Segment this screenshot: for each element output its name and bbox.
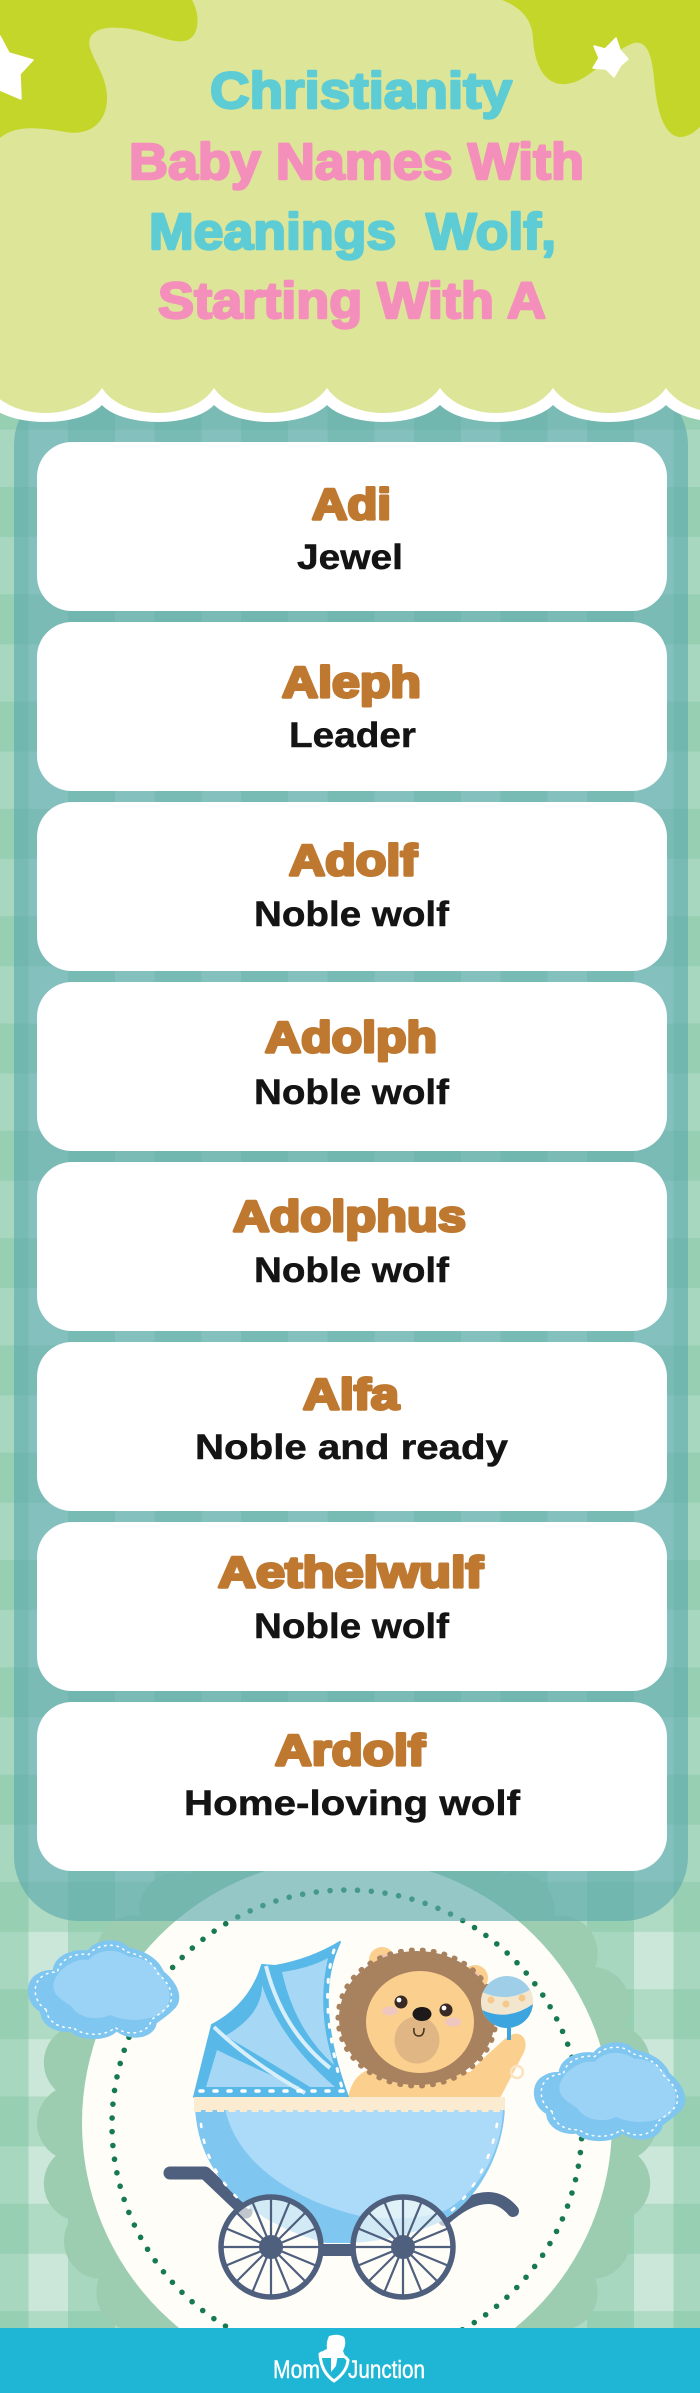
- panel: name cards: [37, 442, 667, 1871]
- card: Ardolf: [37, 1702, 667, 1871]
- card: Adolphus: Noble wolf: [254, 1251, 449, 1290]
- title: Baby Names With: [129, 133, 584, 190]
- header: green banner with scalloped edge: [0, 0, 700, 422]
- card: Aleph: Leader: [289, 716, 416, 755]
- card: Aethelwulf: Aethelwulf: [218, 1548, 483, 1597]
- card: Ardolf: Ardolf: [275, 1726, 425, 1775]
- card: Adi: Adi: [312, 480, 391, 529]
- title: [129, 62, 584, 329]
- card: Adolphus: [37, 1162, 667, 1331]
- card: Adolph: Adolph: [265, 1013, 437, 1062]
- icon: rattle: [481, 1976, 533, 2040]
- card: Alfa: Noble and ready: [195, 1428, 509, 1467]
- card: Ardolf: Home-loving wolf: [184, 1784, 520, 1823]
- card: Alfa: [37, 1342, 667, 1511]
- card: Adolf: Adolf: [289, 836, 417, 885]
- icon: mother and child: [320, 2335, 348, 2381]
- icon: left star: [0, 36, 33, 99]
- logo: MomJunction: [273, 2335, 425, 2384]
- icon: left cloud: [28, 1940, 179, 2039]
- panel: translucent teal list background: [14, 380, 688, 1921]
- card: Aleph: Aleph: [282, 658, 421, 707]
- blob: top left lime: [0, 0, 198, 138]
- logo: MomJunction: Mom: [273, 2356, 320, 2384]
- title: Starting With A: [158, 272, 546, 329]
- icon: carriage wheels: [221, 2197, 453, 2297]
- icon: carriage canopy: [194, 1942, 348, 2097]
- dotted ring: [112, 1890, 582, 2360]
- cream circle: [82, 1858, 612, 2388]
- card: Adolph: [37, 982, 667, 1151]
- footer bar: [0, 2328, 700, 2393]
- card: Adi: Jewel: [297, 538, 403, 577]
- illustration: lion in baby carriage: [170, 1942, 536, 2297]
- icon: right star: [593, 38, 628, 77]
- icon: carriage handles: [170, 2173, 513, 2220]
- card: Alfa: Alfa: [303, 1370, 400, 1419]
- title: Christianity: [210, 62, 513, 119]
- card: Adi: [37, 442, 667, 611]
- icon: right cloud: [534, 2042, 685, 2141]
- icon: carriage basket: [194, 2097, 505, 2243]
- card: Aleph: [37, 622, 667, 791]
- scalloped green backdrop behind circle: [75, 1851, 619, 2393]
- blob: top right lime: [502, 0, 700, 137]
- card: Adolf: [37, 802, 667, 971]
- card: Aethelwulf: [37, 1522, 667, 1691]
- logo: MomJunction: Junction: [348, 2356, 425, 2384]
- icon: lion: [338, 1947, 526, 2098]
- card: Adolph: Noble wolf: [254, 1073, 449, 1112]
- card: Adolf: Noble wolf: [254, 895, 449, 934]
- title: Meanings Wolf,: [149, 203, 556, 260]
- card: Aethelwulf: Noble wolf: [254, 1607, 449, 1646]
- card: Adolphus: Adolphus: [233, 1192, 466, 1241]
